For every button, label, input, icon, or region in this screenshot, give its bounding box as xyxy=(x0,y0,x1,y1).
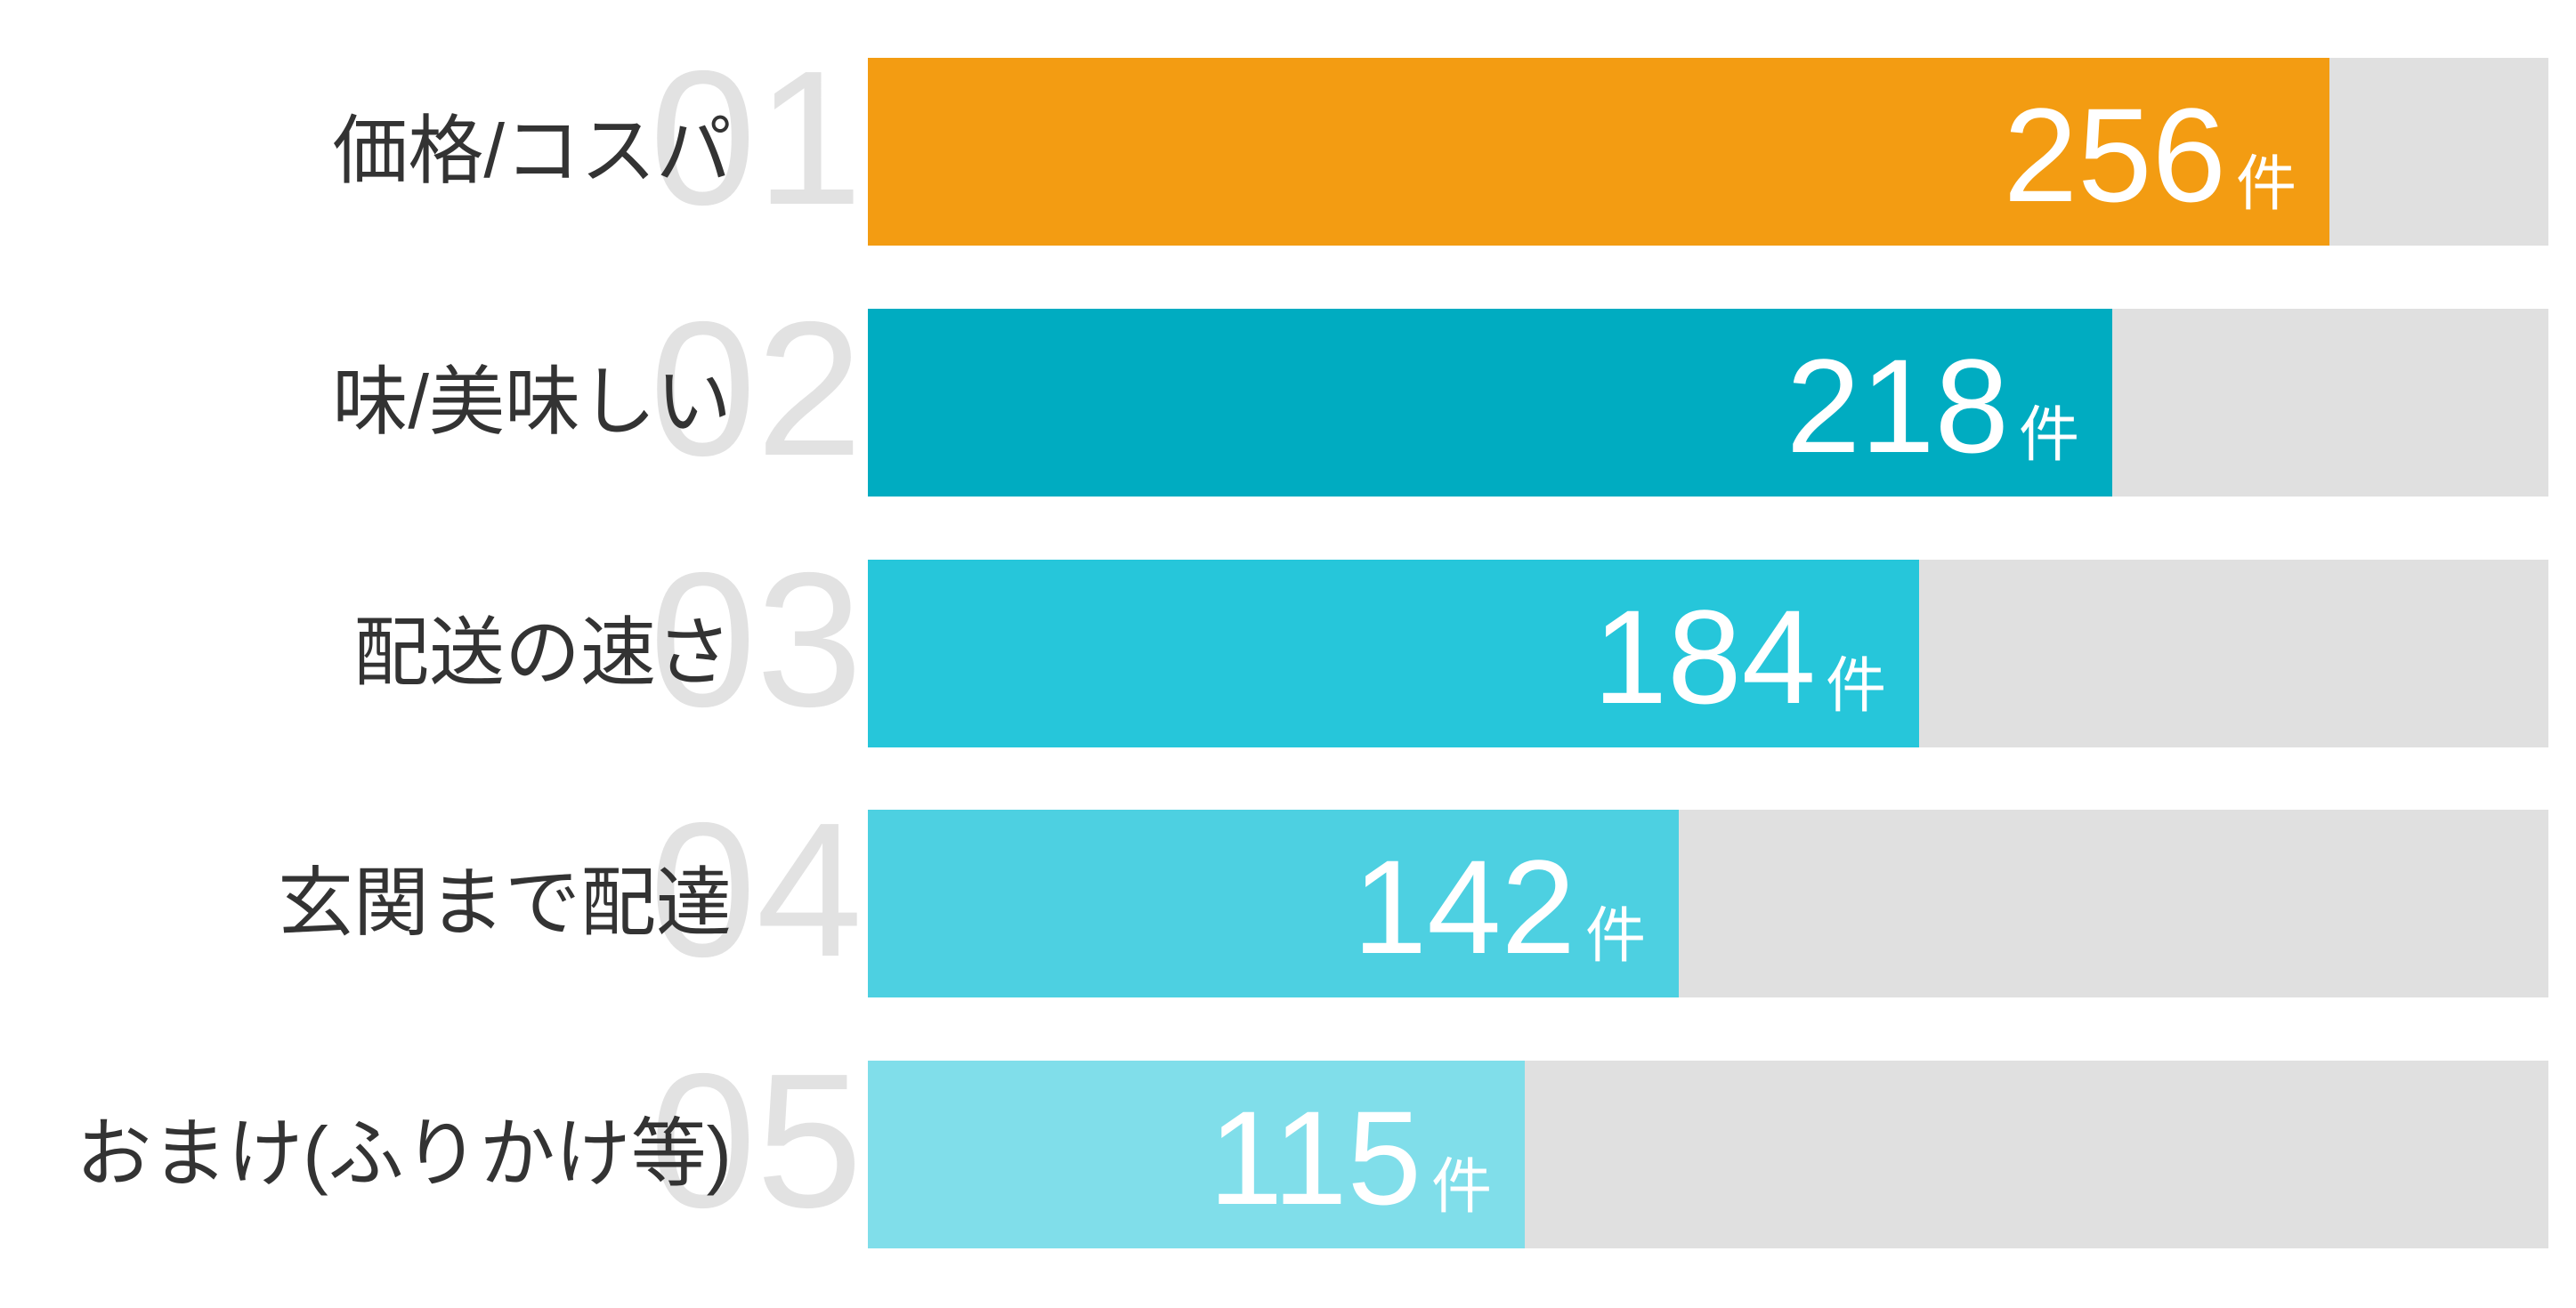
row 1: 価格/コスパ xyxy=(332,30,2548,246)
value: 件 xyxy=(2019,401,2079,469)
value: 件 xyxy=(2236,150,2297,218)
rank number 02: 02 xyxy=(650,281,863,496)
value: 115 xyxy=(1209,1083,1422,1232)
value: 142 xyxy=(1353,832,1576,981)
bar track xyxy=(868,810,2548,997)
bar track xyxy=(868,560,2548,747)
bar fill 142 xyxy=(868,810,1679,997)
row 4: 玄関まで配達 xyxy=(278,782,2548,997)
bar fill 184 xyxy=(868,560,1919,747)
row 2: 味/美味しい xyxy=(332,281,2548,497)
value: 218 xyxy=(1786,331,2009,480)
row 3: 配送の速さ xyxy=(353,532,2548,747)
bar track xyxy=(868,309,2548,497)
bar fill 256 xyxy=(868,58,2329,246)
value: 件 xyxy=(1585,902,1646,970)
label: 玄関まで配達 xyxy=(278,861,732,946)
label: 配送の速さ xyxy=(353,611,732,696)
bar track xyxy=(868,1061,2548,1248)
bar fill 115 xyxy=(868,1061,1525,1248)
value: 件 xyxy=(1431,1153,1492,1221)
row 5: おまけ(ふりかけ等) xyxy=(76,1033,2548,1248)
bar track xyxy=(868,58,2548,246)
label: 味/美味しい xyxy=(332,360,732,445)
rank number 04: 04 xyxy=(650,782,863,997)
label: 価格/コスパ xyxy=(332,109,732,194)
rank number 05: 05 xyxy=(650,1033,863,1247)
value: 件 xyxy=(1826,652,1886,720)
bar fill 218 xyxy=(868,309,2112,497)
rank number 03: 03 xyxy=(650,532,863,747)
label: おまけ(ふりかけ等) xyxy=(76,1112,732,1197)
rank number 01: 01 xyxy=(650,30,863,245)
value: 256 xyxy=(2004,80,2226,230)
value: 184 xyxy=(1593,582,1816,731)
